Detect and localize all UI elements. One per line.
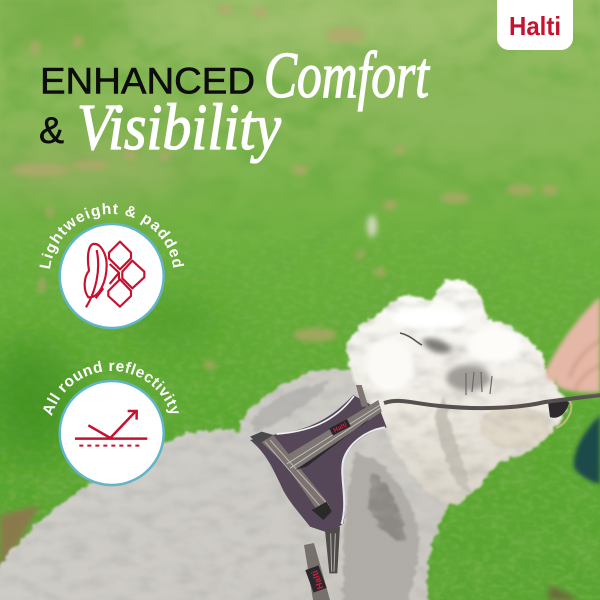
harness bbox=[250, 385, 387, 573]
icon: reflection arrow bbox=[75, 411, 147, 446]
curved label: All round reflectivity bbox=[43, 360, 179, 416]
logo badge: Halti bbox=[509, 11, 561, 41]
title: ampersand: & bbox=[39, 109, 64, 151]
harness tag bbox=[329, 419, 351, 436]
feature: all round reflectivity bbox=[43, 360, 179, 486]
dog chest grey patches bbox=[343, 452, 418, 600]
lead strap with tag: Halti bbox=[309, 569, 325, 591]
harness padding bbox=[250, 395, 387, 533]
title: enhanced: ENHANCED bbox=[40, 60, 255, 102]
title: comfort script: Comfort bbox=[264, 39, 430, 112]
lead strap with tag bbox=[304, 543, 330, 600]
logo badge bbox=[497, 0, 573, 50]
badge circle bbox=[60, 224, 164, 328]
icon: feather and hexagons bbox=[85, 242, 144, 307]
feature: lightweight and padded bbox=[40, 203, 184, 330]
dark object at right edge bbox=[574, 415, 600, 484]
harness tag: Halti bbox=[332, 422, 349, 435]
dog bbox=[0, 279, 600, 600]
hand holding leash bbox=[546, 297, 600, 392]
dog body bbox=[0, 369, 450, 600]
badge circle bbox=[60, 381, 164, 485]
dog head bbox=[347, 279, 567, 505]
leash bbox=[384, 395, 600, 408]
title bbox=[39, 39, 430, 164]
dog nose bbox=[548, 400, 569, 418]
title: visibility script: Visibility bbox=[77, 91, 282, 164]
curved label: Lightweight & padded bbox=[40, 203, 184, 269]
dog head shading bbox=[366, 306, 523, 393]
dog eye and fur strands bbox=[400, 333, 492, 395]
